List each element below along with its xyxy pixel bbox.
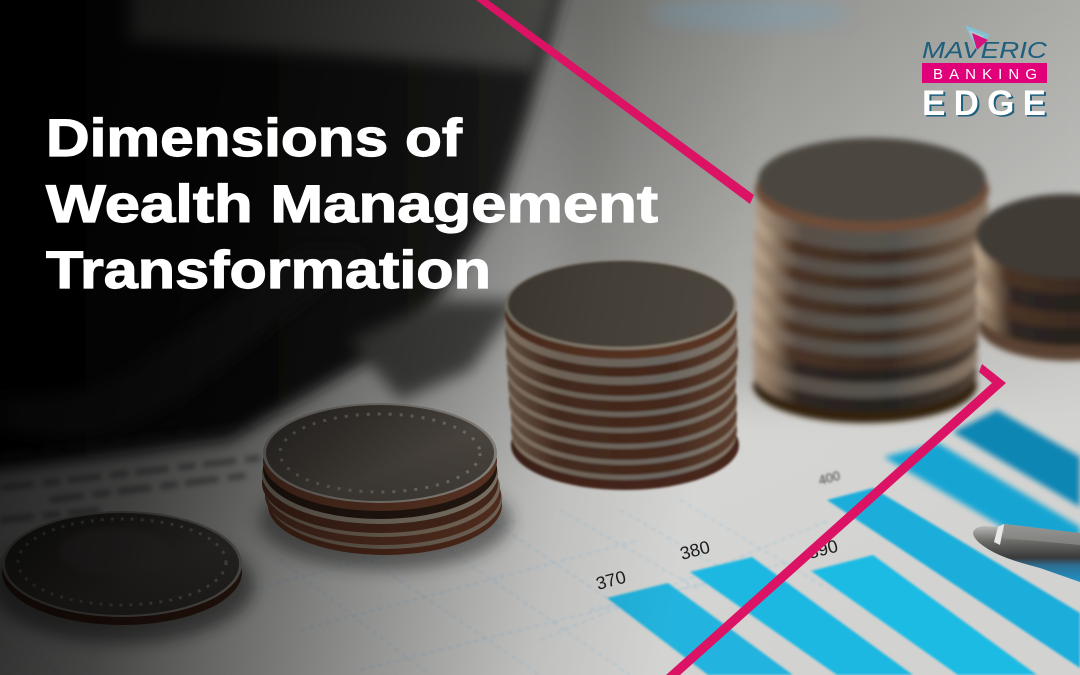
bar 400 bbox=[827, 488, 1080, 668]
logo banking bar bbox=[922, 63, 1047, 83]
pink accent line: lower with hook bbox=[666, 364, 1006, 675]
bar chart bbox=[594, 410, 1080, 675]
bar 390 bbox=[811, 555, 1037, 675]
logo triangle icon bbox=[965, 25, 990, 51]
title: Dimensions of bbox=[46, 109, 462, 168]
bar value labels: 390 bbox=[806, 536, 840, 563]
icon: ballpoint pen bbox=[973, 524, 1080, 582]
bar value labels: 370 bbox=[594, 567, 628, 594]
bar 380 bbox=[690, 557, 913, 675]
bar value labels: 380 bbox=[678, 537, 712, 564]
logo wordmark: MAVERIC bbox=[922, 37, 1047, 63]
title: Transformation bbox=[46, 241, 491, 300]
coin: single left bbox=[0, 511, 254, 643]
logo: Maveric Banking Edge: EDGE bbox=[922, 84, 1046, 123]
blurred label: 400 bbox=[817, 468, 842, 488]
coin stack: five coins bbox=[259, 403, 511, 570]
coin stack: tall blurred bbox=[752, 138, 989, 423]
pink accent line: upper bbox=[476, 0, 754, 204]
title bbox=[46, 109, 658, 300]
bar 420 bbox=[953, 410, 1080, 507]
paper text lines bbox=[0, 426, 260, 520]
logo: Maveric Banking Edge bbox=[922, 25, 1048, 124]
bar 410 bbox=[884, 443, 1080, 573]
chart grid lines bbox=[0, 500, 830, 675]
bar value labels bbox=[594, 536, 840, 594]
bar 370 bbox=[607, 583, 793, 675]
coin stack: far right blurred bbox=[974, 194, 1080, 361]
coin stack: middle bbox=[505, 260, 739, 490]
logo: Maveric Banking Edge: BANKING bbox=[933, 66, 1037, 83]
title: Wealth Management bbox=[46, 175, 658, 234]
logo EDGE word: EDGE bbox=[924, 86, 1048, 124]
